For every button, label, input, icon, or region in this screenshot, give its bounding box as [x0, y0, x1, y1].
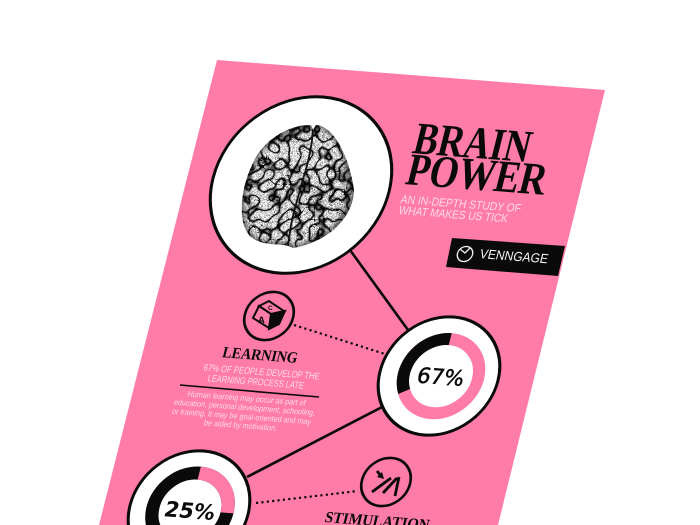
stat text: learning	[202, 363, 321, 392]
connector: brain to 67%	[350, 250, 408, 330]
icon: stimulation	[356, 456, 416, 508]
subtitle: WHAT MAKES US TICK	[397, 204, 510, 225]
subtitle: AN IN-DEPTH STUDY OF	[399, 193, 522, 215]
dotted connector: stimulation	[256, 491, 358, 503]
icon: arrow head	[377, 472, 384, 479]
dotted connector: learning	[294, 325, 385, 354]
logo banner: Venngage	[446, 238, 565, 276]
body text: learning: or training. It may be goal-oriented and may	[171, 407, 313, 426]
icon: logo mark	[456, 246, 474, 262]
title	[402, 113, 554, 205]
icon: brain illustration	[242, 125, 354, 248]
body text: learning: be aided by motivation.	[203, 418, 278, 433]
stat text: learning: LEARNING PROCESS LATE	[206, 373, 305, 392]
body text: learning: Human learning may occur as part of	[187, 390, 307, 408]
divider	[180, 385, 319, 397]
title: POWER	[402, 144, 554, 205]
25% donut	[115, 446, 263, 525]
icon: learning block: C	[268, 305, 273, 312]
subtitle	[397, 193, 522, 225]
heading: learning: LEARNING	[221, 344, 300, 367]
67% donut: 67%	[414, 364, 467, 392]
body text: learning: education, personal development, schooling,	[173, 398, 316, 417]
panel: pink poster background	[99, 60, 605, 525]
icon: learning block	[239, 290, 299, 342]
brain circle	[208, 95, 394, 275]
icon: learning block: A	[258, 315, 265, 326]
67% donut	[365, 312, 513, 440]
connector: 67% to 25%	[247, 407, 382, 477]
body text: learning	[171, 390, 316, 433]
title: BRAIN	[409, 113, 537, 172]
stat text: learning: 67% OF PEOPLE DEVELOP THE	[202, 363, 321, 382]
logo banner: Venngage: VENNGAGE	[478, 246, 550, 266]
